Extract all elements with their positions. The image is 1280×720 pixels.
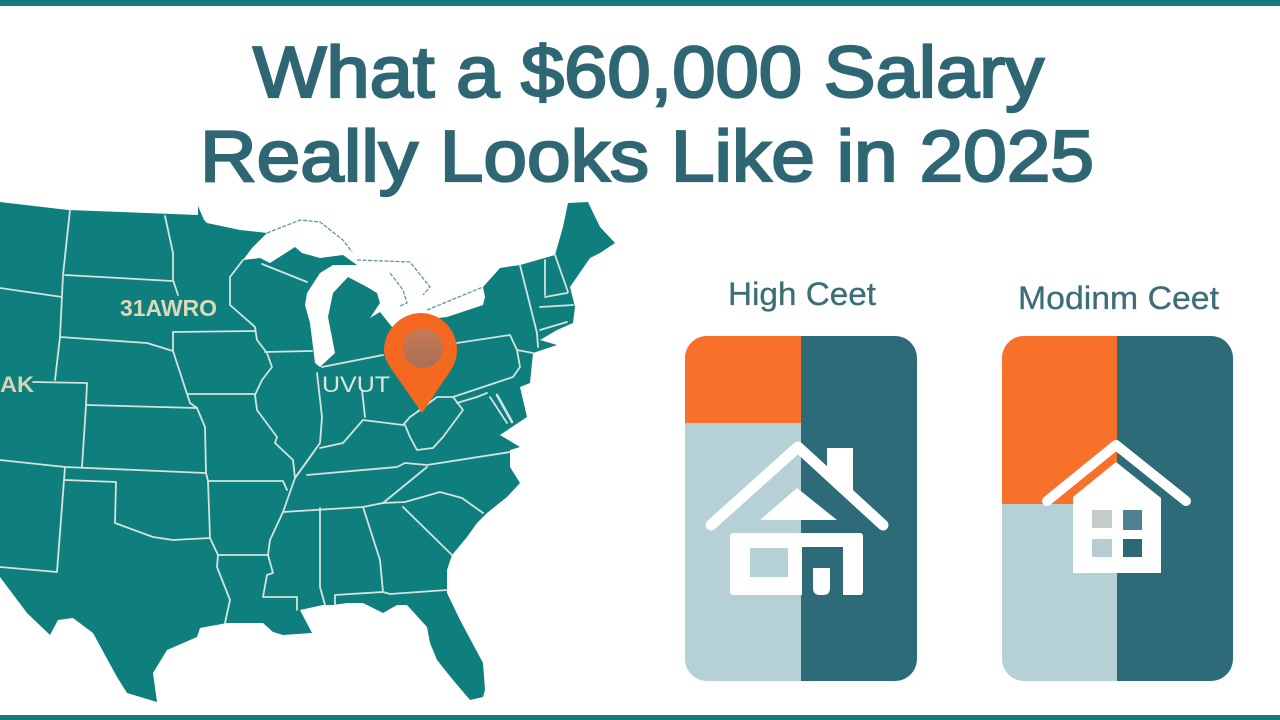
map label: state text: 31AWRO: [120, 295, 217, 321]
top border bar: [0, 0, 1280, 6]
bottom border bar: [0, 715, 1280, 720]
panel: high cost card: [685, 336, 917, 681]
title: Really Looks Like in 2025: [200, 117, 1094, 197]
map label: state text: UVUT: [322, 372, 390, 397]
title: What a $60,000 Salary: [253, 33, 1044, 113]
land silhouette: [0, 202, 615, 702]
location pin: [384, 313, 457, 413]
icon: small house: [1047, 445, 1186, 573]
state borders: [0, 210, 573, 623]
lake outlines: [267, 220, 483, 310]
panel: medium cost card: [1002, 336, 1233, 681]
icon: large house: [711, 447, 883, 595]
US map: [0, 202, 615, 702]
label: high cost: High Ceet: [728, 276, 876, 312]
title: [200, 33, 1094, 197]
map label: state text: AK: [0, 372, 34, 397]
label: medium cost: Modinm Ceet: [1018, 280, 1219, 316]
